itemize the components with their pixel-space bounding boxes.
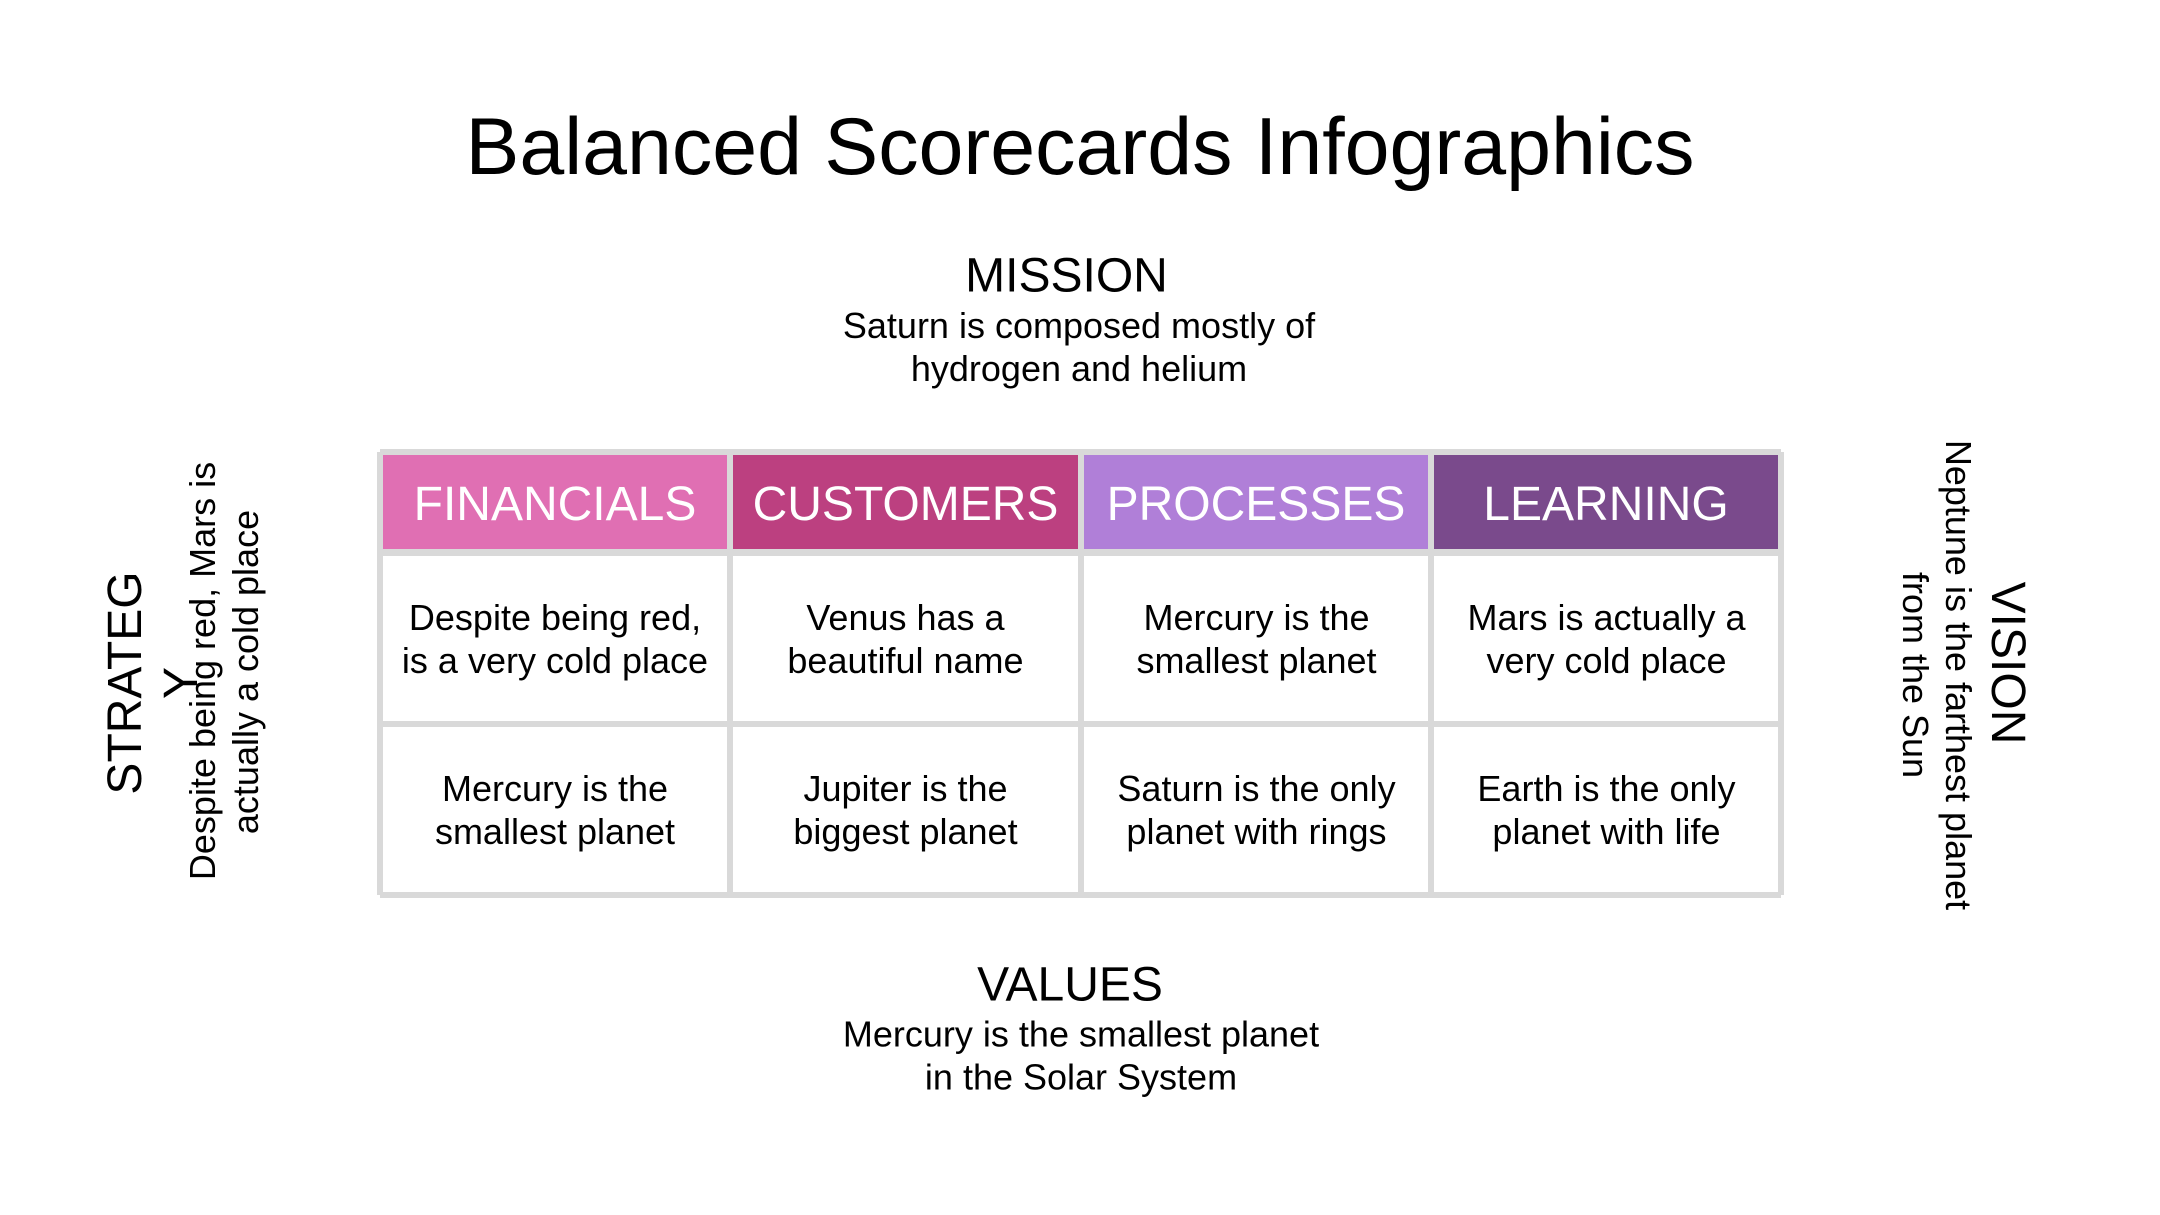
cell: learning row 1: very cold place: [1486, 640, 1727, 681]
text block: mission: hydrogen and helium: [911, 348, 1247, 389]
cell: customers row 2: biggest planet: [793, 811, 1018, 852]
cell: customers row 1: Venus has a: [806, 597, 1006, 638]
text block: values: VALUES: [977, 958, 1163, 1012]
cell: processes row 2: [1117, 768, 1396, 852]
header: processes: PROCESSES: [1107, 478, 1405, 531]
text block: strategy: Despite being red, Mars is: [182, 462, 223, 880]
cell: learning row 2: Earth is the only: [1477, 768, 1736, 809]
cell: learning row 1: [1467, 597, 1747, 681]
header: customers: [733, 455, 1078, 549]
cell: processes row 1: smallest planet: [1136, 640, 1377, 681]
cell: learning row 2: [1477, 768, 1736, 852]
cell: learning row 1: Mars is actually a: [1467, 597, 1747, 638]
cell: financials row 1: Despite being red,: [409, 597, 701, 638]
cell: processes row 2: Saturn is the only: [1117, 768, 1396, 809]
text block: mission: MISSION: [965, 250, 1168, 302]
cell: processes row 2: planet with rings: [1126, 811, 1387, 852]
cell: customers row 1: [787, 597, 1024, 681]
title: Balanced Scorecards Infographics: [466, 102, 1694, 192]
text block: vision: Neptune is the farthest planet: [1938, 440, 1979, 910]
text block: strategy: [99, 462, 266, 880]
header: financials: [383, 455, 727, 549]
text block: mission: Saturn is composed mostly of: [843, 305, 1316, 346]
header: customers: CUSTOMERS: [753, 478, 1058, 531]
text block: strategy: Y: [155, 667, 208, 699]
cell: processes row 1: [1136, 597, 1377, 681]
cell: customers row 1: beautiful name: [787, 640, 1024, 681]
text block: strategy: actually a cold place: [225, 510, 266, 834]
cell: customers row 2: [793, 768, 1018, 852]
cell: learning row 2: planet with life: [1492, 811, 1721, 852]
text block: vision: from the Sun: [1895, 572, 1936, 778]
scorecard table: [377, 449, 1784, 898]
cell: customers row 2: Jupiter is the: [803, 768, 1008, 809]
cell: financials row 2: smallest planet: [435, 811, 675, 852]
cell: financials row 1: is a very cold place: [402, 640, 708, 681]
text block: values: in the Solar System: [925, 1056, 1237, 1098]
cell: processes row 1: Mercury is the: [1143, 597, 1370, 638]
text block: values: [843, 958, 1319, 1098]
text block: vision: VISION: [1981, 582, 2034, 744]
cell: financials row 1: [402, 597, 708, 681]
text block: strategy: STRATEG: [99, 571, 152, 795]
header: processes: [1084, 455, 1428, 549]
header: learning: LEARNING: [1483, 478, 1729, 531]
header: financials: FINANCIALS: [414, 478, 696, 531]
cell: financials row 2: Mercury is the: [442, 768, 668, 809]
header: learning: [1434, 455, 1778, 549]
text block: vision: [1895, 440, 2034, 910]
cell: financials row 2: [435, 768, 675, 852]
text block: mission: [843, 250, 1316, 389]
text block: values: Mercury is the smallest planet: [843, 1014, 1319, 1054]
